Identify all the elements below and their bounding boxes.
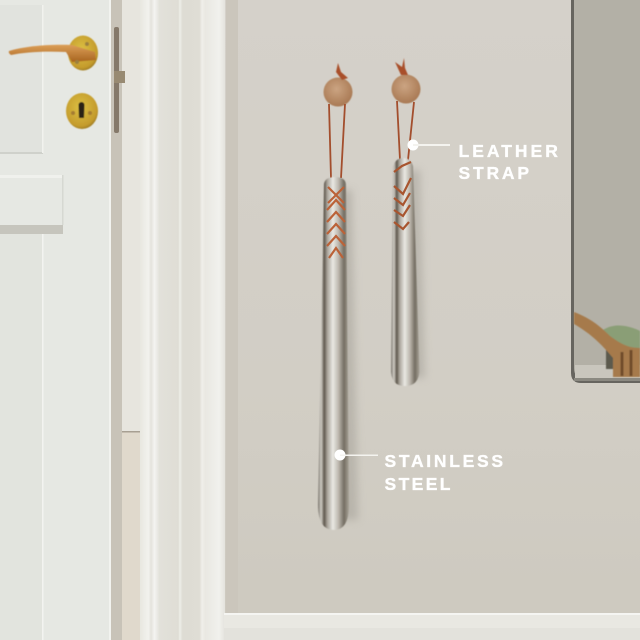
basket reflection [574, 312, 640, 377]
door [0, 0, 111, 640]
corridor beyond the door [111, 0, 140, 640]
lacing [327, 187, 345, 258]
label: stainless steel: STAINLESS [384, 451, 506, 471]
door frame moulding [140, 0, 225, 640]
mirror [571, 0, 640, 383]
wood knob [392, 58, 420, 104]
callout: stainless steel [334, 450, 506, 494]
label: stainless steel: STEEL [384, 474, 453, 494]
label: leather strap: LEATHER [458, 141, 561, 161]
shoehorn short [391, 58, 425, 386]
door handle [9, 36, 98, 70]
wall [225, 0, 640, 640]
baseboard [224, 613, 640, 640]
lacing [394, 162, 411, 229]
label: leather strap: STRAP [458, 163, 532, 183]
wood knob [324, 63, 352, 106]
steel blade [391, 158, 420, 386]
strap loop [397, 101, 414, 160]
shadow [408, 170, 425, 378]
keyhole escutcheon [66, 93, 98, 129]
shoehorn long [318, 63, 358, 530]
strap loop [329, 104, 345, 178]
steel blade [318, 177, 349, 530]
callout: leather strap [408, 140, 561, 183]
shadow [340, 190, 358, 520]
hinge plate [114, 27, 125, 133]
